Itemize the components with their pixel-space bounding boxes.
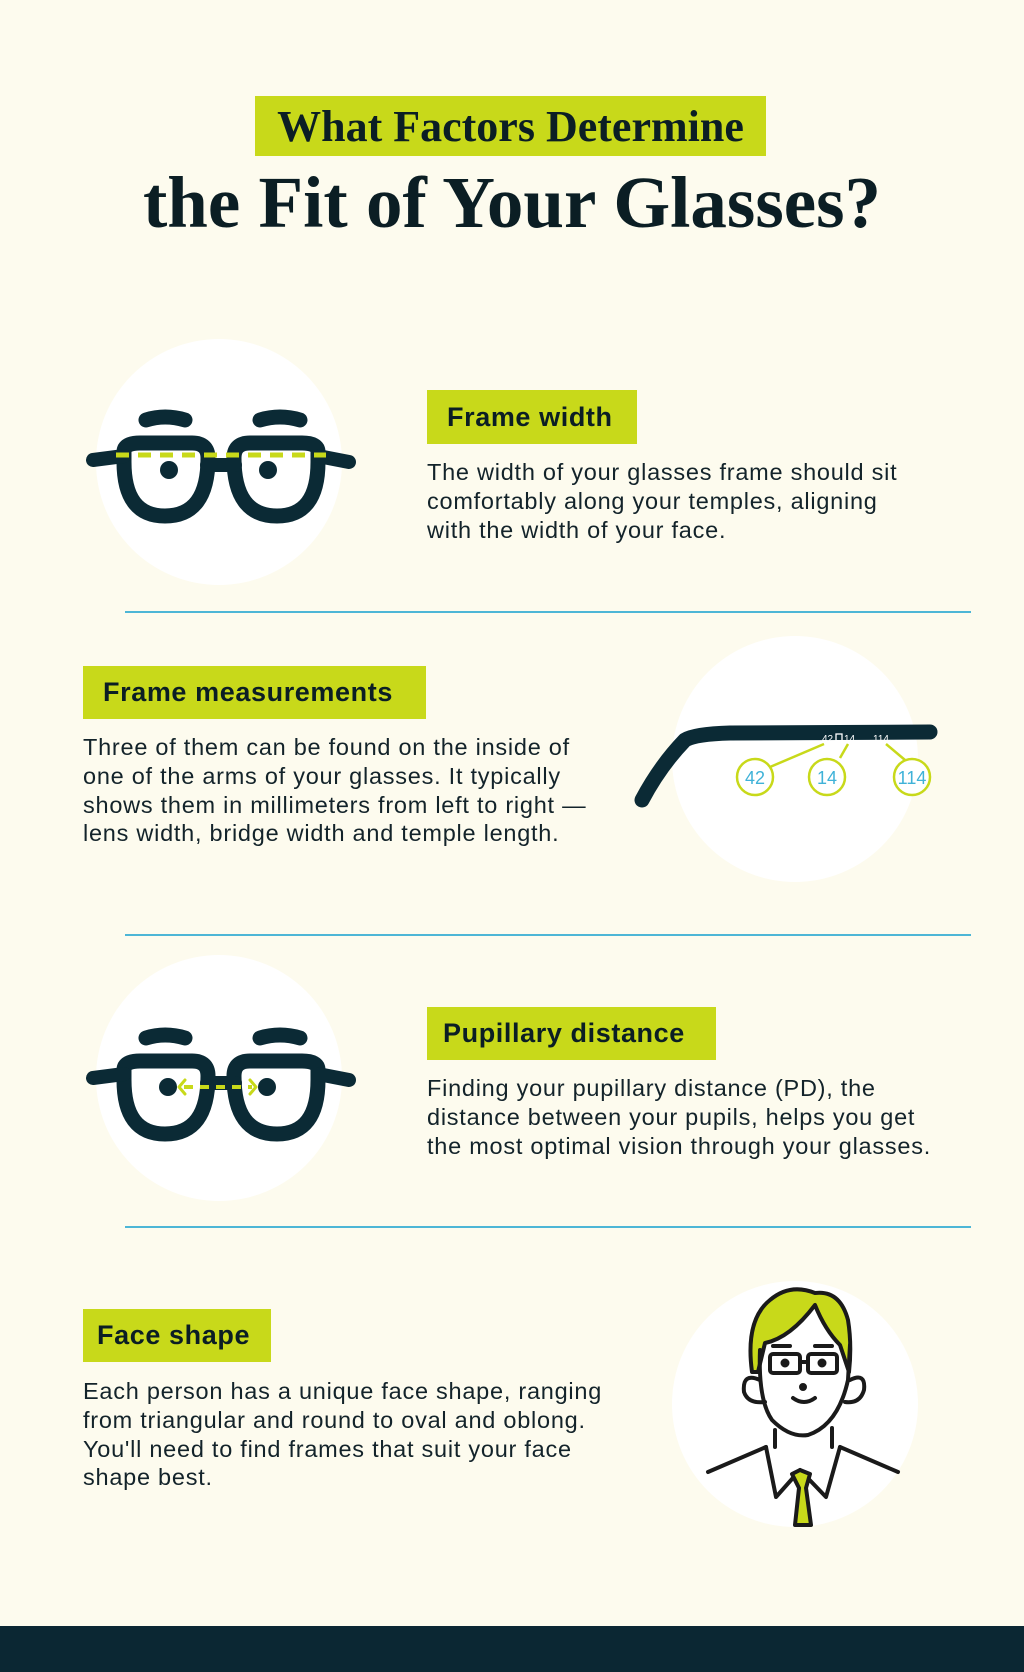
label: frame measurements: Frame measurements xyxy=(103,677,393,707)
icon: glasses arm with measurements: 114 xyxy=(898,768,926,788)
text: face shape xyxy=(83,1378,602,1490)
label: face shape xyxy=(83,1309,271,1362)
icon: person with glasses xyxy=(672,1281,918,1527)
text: frame width: The width of your glasses frame should sit xyxy=(427,459,897,485)
text: pupillary distance: the most optimal vision through your glasses. xyxy=(427,1133,931,1159)
text: frame measurements: shows them in millimeters from left to right — xyxy=(83,792,586,818)
label: pupillary distance: Pupillary distance xyxy=(443,1018,685,1048)
label: frame measurements xyxy=(83,666,426,719)
label: face shape: Face shape xyxy=(97,1320,250,1350)
label: pupillary distance xyxy=(427,1007,716,1060)
icon: glasses arm with measurements: 14 xyxy=(817,768,837,788)
icon: glasses pupillary distance xyxy=(86,955,356,1201)
text: face shape: You'll need to find frames that suit your face xyxy=(83,1436,572,1462)
footer bar xyxy=(0,1626,1024,1672)
text: face shape: shape best. xyxy=(83,1464,213,1490)
text: frame measurements: Three of them can be found on the inside of xyxy=(83,734,570,760)
text: pupillary distance xyxy=(427,1075,931,1159)
text: pupillary distance: Finding your pupillary distance (PD), the xyxy=(427,1075,876,1101)
text: frame measurements: one of the arms of your glasses. It typically xyxy=(83,763,561,789)
icon: glasses arm with measurements: 14 xyxy=(844,734,856,745)
text: frame measurements xyxy=(83,734,586,846)
icon: glasses arm with measurements: 42 xyxy=(745,768,765,788)
label: frame width: Frame width xyxy=(447,402,613,432)
icon: glasses arm with measurements: 42 xyxy=(822,734,834,745)
text: frame width xyxy=(427,459,897,543)
icon: glasses arm with measurements: 114 xyxy=(873,734,889,745)
text: frame measurements: lens width, bridge width and temple length. xyxy=(83,820,559,846)
text: frame width: comfortably along your temples, aligning xyxy=(427,488,878,514)
title highlight: What Factors Determine xyxy=(277,102,744,150)
label: frame width xyxy=(427,390,637,444)
icon: glasses frame width xyxy=(96,339,342,585)
icon: glasses frame width xyxy=(93,417,349,516)
icon: glasses arm with measurements xyxy=(634,636,938,882)
text: frame width: with the width of your face. xyxy=(427,517,726,543)
text: pupillary distance: distance between your pupils, helps you get xyxy=(427,1104,915,1130)
text: face shape: from triangular and round to oval and oblong. xyxy=(83,1407,586,1433)
title main: the Fit of Your Glasses? xyxy=(143,162,881,243)
text: face shape: Each person has a unique face shape, ranging xyxy=(83,1378,602,1404)
